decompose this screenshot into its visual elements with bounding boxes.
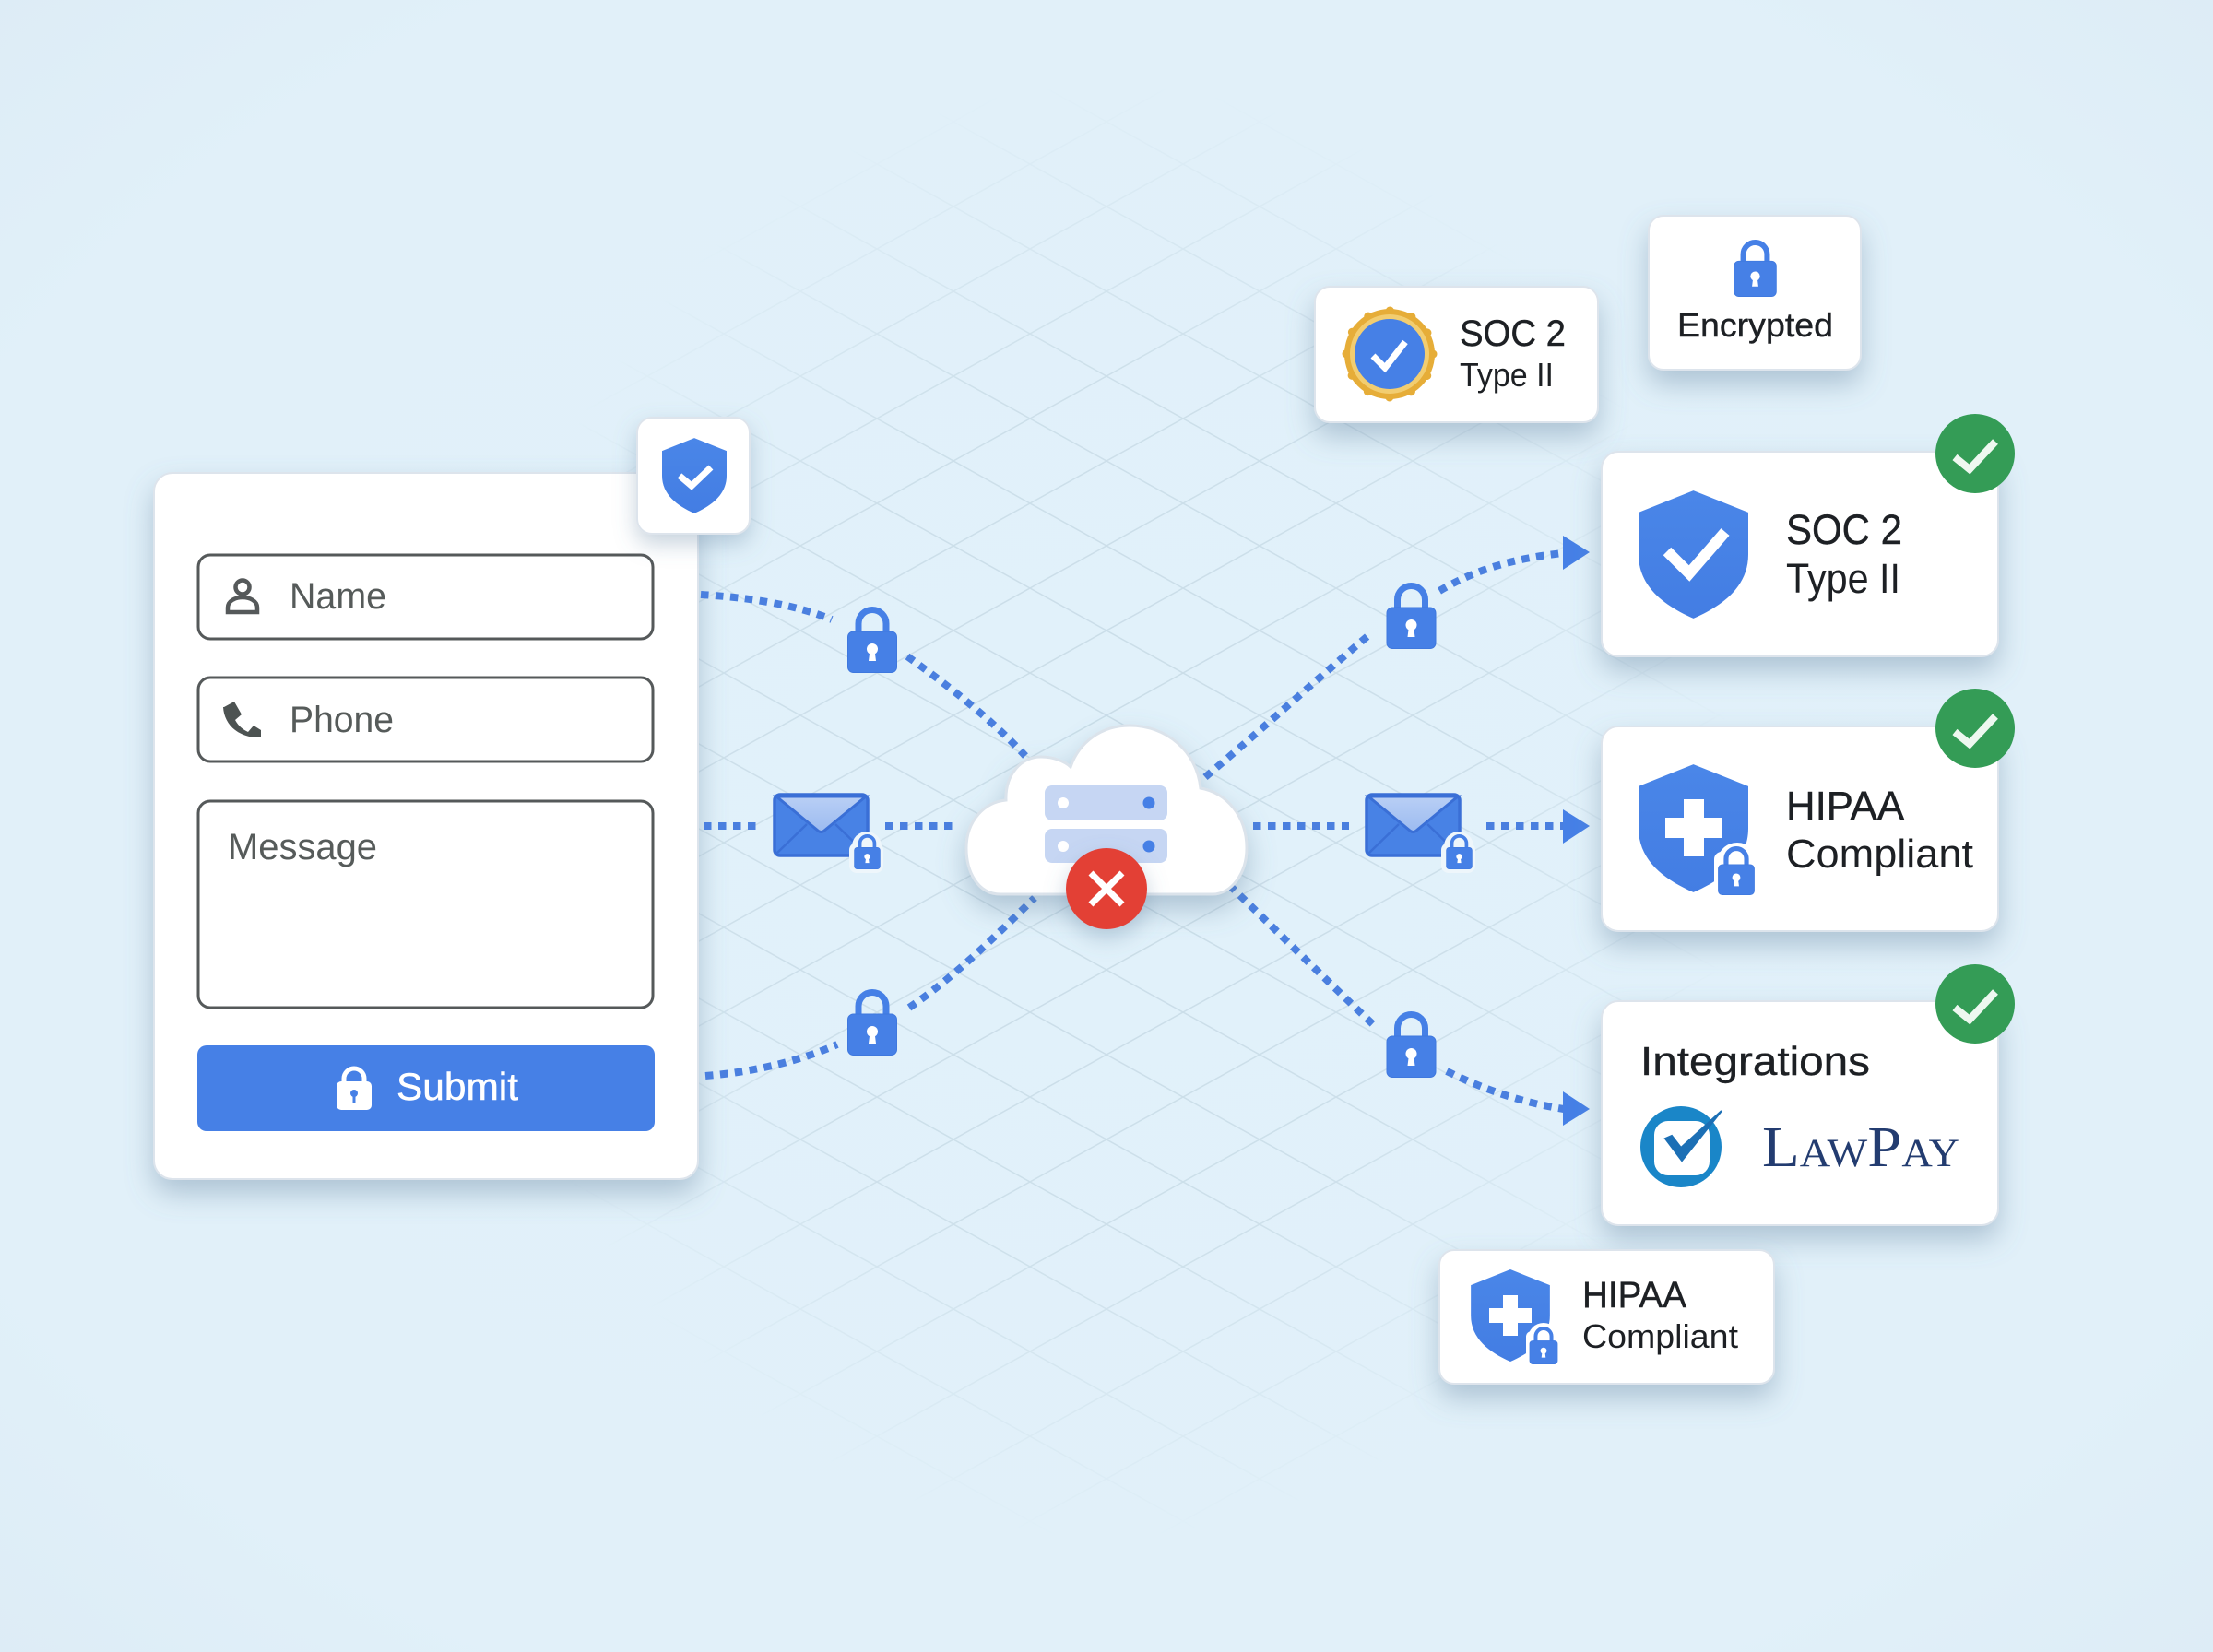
LawPay wordmark: LawPay	[1762, 1116, 1959, 1179]
icon: lock	[1734, 242, 1776, 297]
arrow: top right	[1563, 536, 1590, 570]
sublabel: Compliant	[1786, 832, 1973, 877]
icon: envelope right	[1367, 795, 1475, 873]
card: Integrations LawPay	[1602, 1001, 1998, 1225]
icon: envelope left	[775, 795, 883, 873]
lock: bottom right	[1387, 1014, 1436, 1077]
icon: white lock	[337, 1068, 372, 1110]
arrow: bottom right	[1563, 1092, 1590, 1126]
badge: SOC 2 Type II small	[1315, 287, 1598, 422]
icon: person	[228, 581, 257, 612]
connector: top left	[701, 595, 1025, 756]
message field	[198, 801, 653, 1008]
icon: red error	[1066, 848, 1147, 929]
label: SOC 2	[1460, 313, 1566, 354]
icon: gold medal	[1344, 309, 1435, 399]
connector: top right	[1205, 553, 1563, 777]
card: HIPAA Compliant	[1602, 726, 1998, 931]
icon: shield plus	[1639, 764, 1760, 896]
phone field	[198, 678, 653, 761]
badge: green check 2	[1935, 689, 2015, 768]
card: SOC 2 Type II	[1602, 452, 1998, 656]
label: Encrypted	[1677, 306, 1833, 344]
label: SOC 2	[1786, 506, 1902, 553]
badge: green check 3	[1935, 964, 2015, 1044]
label: HIPAA	[1582, 1275, 1686, 1316]
badge: HIPAA Compliant small	[1439, 1250, 1774, 1384]
sublabel: Compliant	[1582, 1317, 1738, 1355]
connector: bottom left	[705, 898, 1035, 1076]
connector: middle right	[1253, 822, 1564, 830]
name field	[198, 555, 653, 639]
background diamond grid	[699, 194, 1619, 1426]
badge: Encrypted	[1649, 216, 1861, 370]
lock: top left	[848, 610, 896, 673]
name placeholder: Name	[290, 576, 386, 617]
icon: shield plus	[1471, 1269, 1561, 1365]
sublabel: Type II	[1460, 356, 1554, 394]
lock: top right	[1387, 586, 1436, 649]
icon: LawPay logo	[1640, 1106, 1722, 1187]
badge: green check 1	[1935, 414, 2015, 493]
submit label: Submit	[396, 1065, 518, 1108]
cloud	[966, 726, 1247, 894]
lock: bottom left	[848, 992, 896, 1055]
phone placeholder: Phone	[290, 700, 394, 740]
label: HIPAA	[1786, 784, 1905, 829]
cloud server with error	[966, 726, 1247, 929]
icon: phone	[223, 702, 261, 738]
connector: bottom right	[1229, 885, 1564, 1109]
label: Integrations	[1640, 1039, 1870, 1084]
submit button	[197, 1045, 655, 1131]
connector: middle left	[704, 822, 953, 830]
panel: contact form	[154, 473, 698, 1179]
message placeholder: Message	[228, 827, 377, 867]
arrow: middle right	[1563, 809, 1590, 844]
icon: shield check	[662, 438, 727, 513]
icon: shield check	[1639, 490, 1748, 619]
form card	[154, 473, 698, 1179]
shield tile	[637, 418, 750, 534]
sublabel: Type II	[1786, 555, 1900, 602]
server racks	[1045, 785, 1167, 863]
